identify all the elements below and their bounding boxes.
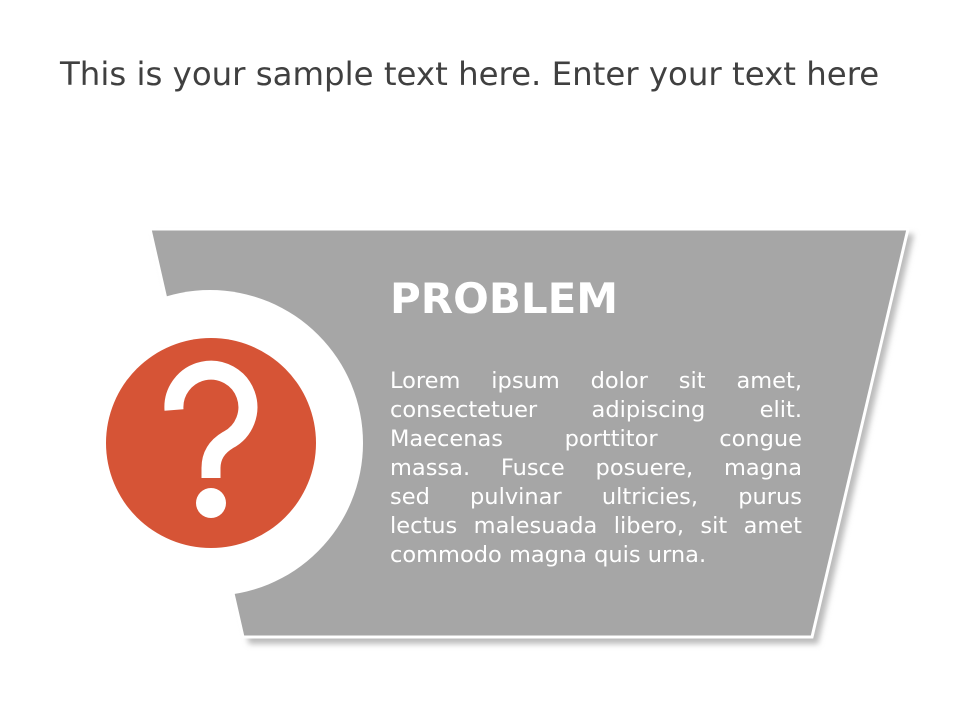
text block: massa. Fusce posuere, magna — [390, 455, 802, 481]
text block: sed pulvinar ultricies, purus — [390, 484, 802, 510]
text block: consectetuer adipiscing elit. — [390, 397, 802, 423]
text block: Maecenas porttitor congue — [390, 426, 802, 452]
text block — [390, 368, 802, 568]
text block: commodo magna quis urna. — [390, 542, 706, 568]
heading: PROBLEM — [390, 274, 618, 323]
text block: lectus malesuada libero, sit amet — [390, 513, 802, 539]
icon: question mark — [106, 338, 316, 548]
title: This is your sample text here. Enter your text here — [60, 55, 879, 93]
text block: Lorem ipsum dolor sit amet, — [390, 368, 802, 394]
